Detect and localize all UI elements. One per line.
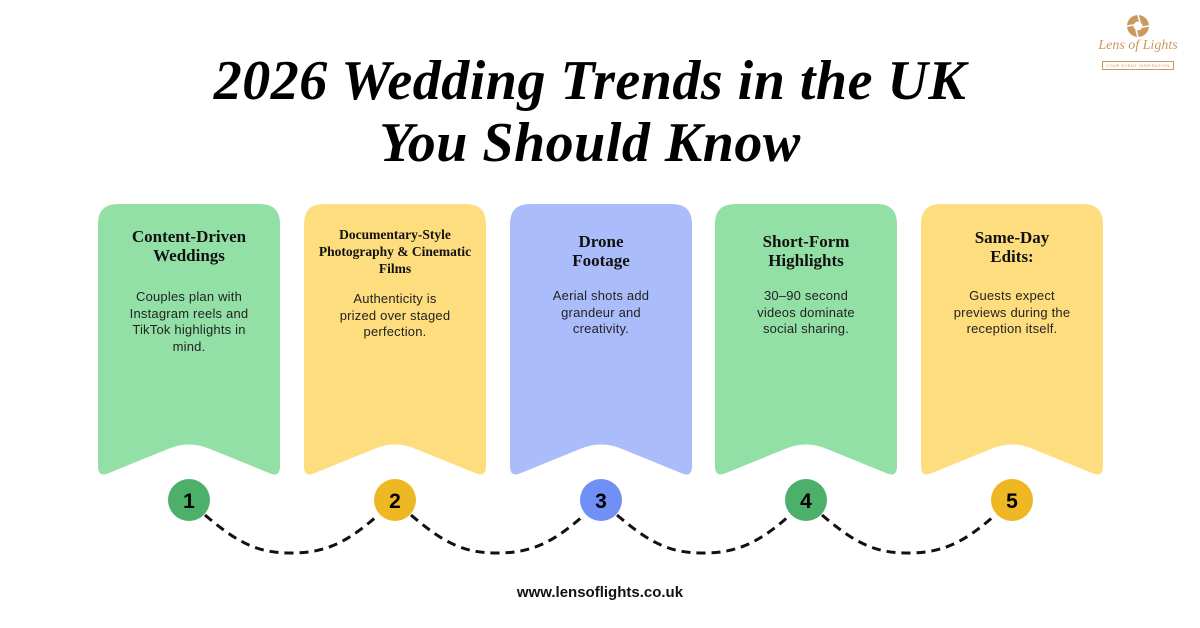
card 1 heading	[132, 227, 246, 265]
title: 2026 Wedding Trends in the UK	[214, 50, 966, 112]
card 1 text: TikTok highlights in	[132, 322, 246, 337]
card 3 heading	[572, 232, 630, 270]
logo: Lens of Lights	[1098, 38, 1178, 53]
card 4 text: social sharing.	[763, 321, 849, 336]
card 3 text: creativity.	[573, 321, 629, 336]
card 5 text: previews during the	[954, 304, 1070, 320]
title: You Should Know	[379, 112, 801, 174]
number circles	[168, 479, 1033, 521]
card 3 heading: Drone	[578, 232, 624, 251]
number circles: 5	[1006, 490, 1018, 513]
card 1 text: mind.	[173, 338, 205, 354]
card 5 heading: Edits:	[990, 247, 1034, 266]
card 5 heading	[975, 228, 1050, 266]
card 1 text: Couples plan with	[136, 289, 242, 304]
card 1 heading: Weddings	[153, 246, 225, 265]
card 4 heading	[763, 232, 850, 270]
card 2 text: prized over staged	[340, 308, 450, 322]
card 1 heading: Content-Driven	[132, 227, 246, 246]
card 4 heading: Short-Form	[763, 232, 849, 251]
card 2 text: perfection.	[364, 324, 426, 339]
card 4 heading: Highlights	[768, 251, 844, 270]
logo	[1098, 15, 1178, 70]
card 2 heading: Films	[379, 261, 411, 276]
card 3 text	[552, 288, 649, 336]
card 2 text	[340, 291, 450, 339]
logo: YOUR EVENT INSPIRATION	[1106, 63, 1170, 68]
title	[213, 50, 969, 174]
number circles: 1	[183, 490, 195, 513]
card 5 heading: Same-Day	[975, 228, 1049, 247]
card 3 heading: Footage	[572, 251, 630, 270]
card 2 heading: Photography & Cinematic	[319, 244, 471, 259]
number circles: 4	[800, 490, 812, 513]
card shapes	[98, 204, 1103, 474]
card 3 text: Aerial shots add	[553, 288, 649, 303]
card 2 text: Authenticity is	[353, 291, 437, 306]
card 4 text	[757, 288, 855, 336]
card 2 heading: Documentary-Style	[339, 227, 451, 242]
card 5 text: reception itself.	[967, 321, 1057, 336]
number circles: 2	[389, 490, 401, 513]
icon: aperture	[1127, 15, 1149, 37]
card 3 text: grandeur and	[561, 304, 641, 320]
number circles: 3	[595, 490, 607, 513]
card 2 heading	[319, 227, 471, 276]
card 1 text: Instagram reels and	[130, 306, 248, 320]
card 4 text: videos dominate	[757, 304, 855, 320]
footer url: www.lensoflights.co.uk	[517, 584, 683, 601]
card 5 text: Guests expect	[969, 288, 1055, 303]
card 5 text	[954, 288, 1070, 336]
dashed connectors	[205, 515, 995, 553]
card 4 text: 30–90 second	[764, 288, 848, 303]
card 1 text	[130, 289, 248, 354]
